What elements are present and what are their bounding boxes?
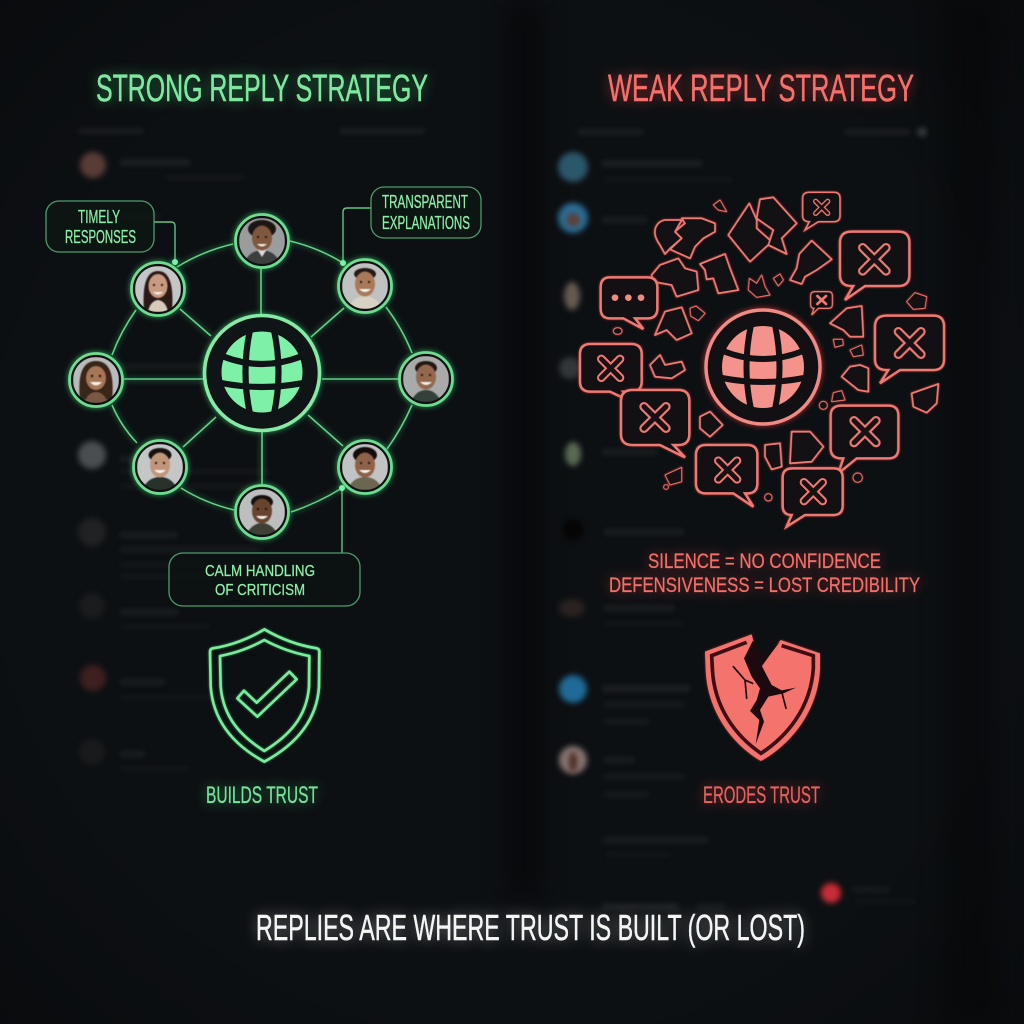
label: erodes trust: ERODES TRUST: [703, 782, 820, 809]
bubble: x right: [875, 316, 944, 383]
callout: timely responses: RESPONSES: [65, 227, 136, 247]
callout: calm handling of criticism: OF CRITICISM: [215, 582, 305, 599]
avatar: right: [400, 352, 452, 406]
panel: network diagram: [46, 187, 481, 606]
avatar: bottom: [236, 486, 288, 538]
callout: transparent explanations: [340, 187, 481, 266]
central globe: weak: [706, 310, 820, 424]
avatar: lower right: [338, 440, 392, 494]
icon: shield with check: [210, 629, 319, 762]
label: builds trust: BUILDS TRUST: [206, 782, 318, 809]
avatar: left: [70, 354, 122, 406]
bubble: small x top: [803, 192, 840, 230]
avatar: upper left: [132, 262, 184, 316]
central globe: [204, 316, 320, 430]
callout: calm handling of criticism: CALM HANDLING: [205, 563, 315, 580]
callout: calm handling of criticism: [169, 485, 360, 606]
bubble: x lower right: [831, 406, 898, 473]
callout: transparent explanations: TRANSPARENT: [382, 192, 468, 212]
bubble: x left: [580, 344, 642, 403]
blurred feed: left panel: [78, 129, 425, 770]
callout: timely responses: [46, 201, 178, 265]
blurred feed: right panel: [558, 128, 926, 909]
callout: transparent explanations: EXPLANATIONS: [382, 213, 470, 233]
text block: weak strategy consequences: DEFENSIVENESS = LOST CREDIBILITY: [609, 574, 920, 597]
bubble: x lower left: [621, 390, 689, 457]
bubble: x upper right: [840, 232, 909, 300]
text block: weak strategy consequences: [609, 550, 920, 597]
avatar: upper right: [338, 260, 392, 312]
text block: weak strategy consequences: SILENCE = NO CONFIDENCE: [648, 550, 881, 573]
icon: cracked shield: [705, 634, 820, 761]
bubble: x bottom: [696, 445, 757, 507]
network lines: [112, 241, 412, 512]
small debris: [613, 200, 927, 501]
bubble: tiny glyph: [811, 292, 832, 315]
shattered fragments: [650, 197, 938, 469]
bubble: x bottom right: [783, 468, 843, 527]
title: strong reply strategy: STRONG REPLY STRATEGY: [96, 68, 428, 110]
avatar: top: [236, 214, 288, 268]
bubble: typing dots: [601, 277, 657, 329]
callout: timely responses: TIMELY: [78, 207, 120, 227]
avatar: lower left: [134, 440, 186, 494]
panel: broken speech bubbles: [580, 192, 944, 527]
